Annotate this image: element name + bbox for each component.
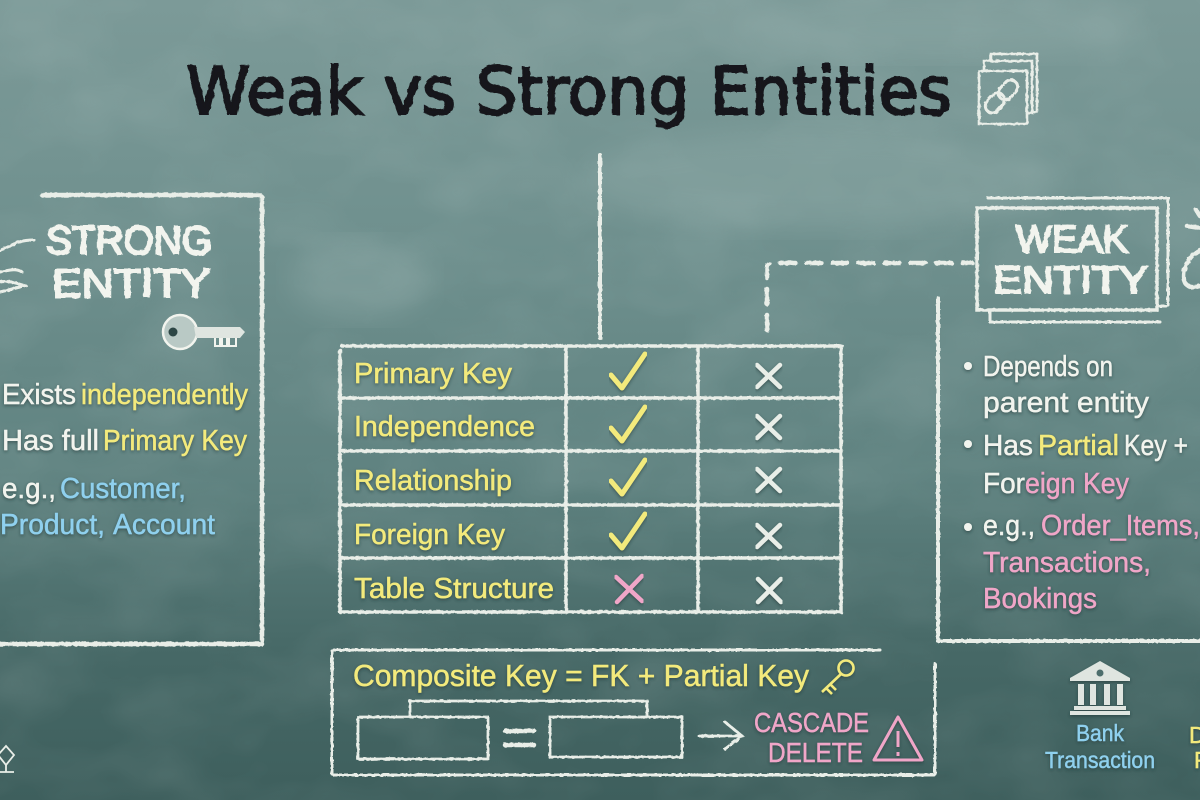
text block: weak entity bullets: Has	[983, 430, 1033, 462]
crosses: weak column	[757, 365, 781, 602]
text block: strong entity bullets: Primary Key	[103, 425, 247, 457]
label: bank transaction	[1045, 720, 1155, 773]
row labels: Primary Key	[354, 358, 512, 390]
chain link	[982, 77, 1021, 116]
text block: weak entity bullets: Bookings	[983, 583, 1097, 615]
icon: linked documents	[979, 54, 1037, 124]
comparison table	[340, 346, 842, 612]
row labels: Independence	[354, 411, 535, 443]
text block: weak entity bullets	[964, 351, 1200, 615]
text block: weak entity bullets: e.g.,	[983, 510, 1035, 542]
text block: strong entity bullets: Customer,	[60, 473, 186, 505]
label: bank transaction: Bank	[1076, 720, 1124, 746]
text block: weak entity bullets: parent entity	[983, 387, 1150, 419]
panel border: strong entity	[0, 195, 262, 644]
text block: weak entity bullets: Key +	[1124, 430, 1188, 462]
text block: strong entity bullets: Exists	[2, 379, 76, 411]
icon: key	[163, 315, 245, 349]
panel: strong entity	[0, 195, 262, 644]
panel border: composite key	[332, 650, 935, 775]
icon: link fragment	[1184, 210, 1200, 287]
heading: composite key formula: Composite Key = FK + Partial Key	[353, 658, 809, 693]
composite key diagram	[358, 701, 742, 759]
text block: weak entity bullets: For	[983, 468, 1025, 500]
label: bank transaction: Transaction	[1045, 747, 1155, 773]
text block: weak entity bullets: eign Key	[1025, 468, 1129, 500]
heading: strong entity: STRONG	[46, 219, 212, 263]
icon: small key	[822, 660, 854, 694]
dashed connector	[767, 263, 972, 330]
cascade delete label: CASCADE	[754, 707, 869, 738]
heading: strong entity: ENTITY	[52, 262, 210, 306]
check marks	[611, 354, 645, 548]
label: cropped yellow text	[1189, 722, 1200, 773]
cascade delete label: DELETE	[768, 737, 863, 768]
icon: small tree	[0, 746, 14, 772]
panel: composite key	[332, 650, 935, 775]
icon: wing	[0, 240, 34, 292]
panel: weak entity	[938, 198, 1200, 641]
row labels: Table Structure	[354, 573, 554, 605]
cascade delete label	[754, 707, 869, 768]
text block: strong entity bullets: e.g.,	[2, 473, 56, 505]
arrow	[699, 722, 742, 749]
text block: weak entity bullets: Transactions,	[983, 547, 1151, 579]
heading box: weak entity: ENTITY	[993, 260, 1148, 302]
row labels	[354, 358, 554, 605]
center divider	[598, 155, 602, 338]
heading box: weak entity: WEAK	[1016, 219, 1128, 261]
text block: strong entity bullets: Account	[113, 509, 215, 541]
row labels: Relationship	[354, 465, 512, 497]
row labels: Foreign Key	[354, 519, 505, 551]
text block: strong entity bullets	[0, 379, 248, 541]
cross: table structure strong	[616, 576, 642, 602]
table grid	[340, 346, 842, 612]
text block: strong entity bullets: Has full	[2, 425, 99, 457]
text block: strong entity bullets: Product,	[0, 509, 105, 541]
title: Weak vs Strong Entities	[186, 53, 952, 130]
text block: weak entity bullets: Partial	[1038, 430, 1119, 462]
heading: strong entity	[46, 219, 212, 306]
text block: weak entity bullets: Depends on	[983, 351, 1113, 383]
icon: warning triangle	[874, 717, 922, 760]
panel border: weak entity	[938, 298, 1200, 641]
heading box: weak entity	[977, 198, 1168, 322]
icon: bank	[1070, 661, 1130, 715]
text block: strong entity bullets: independently	[81, 379, 248, 411]
